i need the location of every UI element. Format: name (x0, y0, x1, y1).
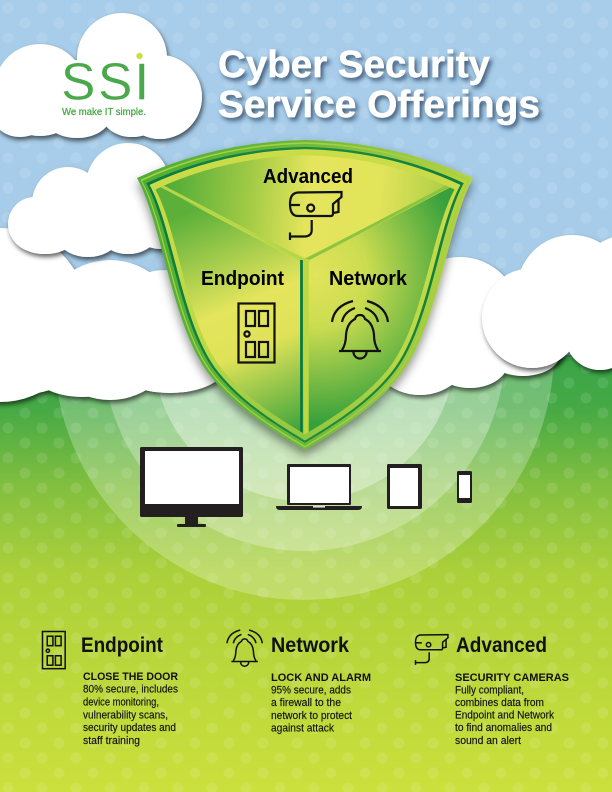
green ground background (0, 355, 612, 792)
description: Endpoint and Network (455, 710, 555, 722)
title: Service Offerings (218, 84, 540, 126)
description: vulnerability scans, (83, 709, 168, 721)
title: Cyber Security (218, 44, 490, 86)
description: 95% secure, adds (271, 685, 352, 697)
shield rim (137, 140, 473, 450)
description: staff training (83, 735, 140, 747)
description (271, 685, 352, 735)
logo letters: ssi (61, 37, 150, 115)
icon: bell small (227, 630, 262, 666)
description (455, 685, 555, 747)
description: device monitoring, (83, 697, 159, 709)
heading: Network (271, 634, 349, 657)
cloud: logo cloud (0, 13, 202, 139)
title (218, 44, 540, 126)
heading: Advanced (456, 634, 547, 657)
cloud: right back (365, 257, 561, 395)
description: sound an alert (455, 735, 521, 747)
shield (130, 130, 480, 450)
device: phone (457, 471, 472, 503)
shield top panel (158, 155, 450, 258)
heading: Endpoint (81, 634, 163, 657)
description: against attack (271, 723, 335, 735)
icon: security camera (290, 192, 342, 240)
icon: alarm bell (332, 301, 388, 358)
logo tagline: We make IT simple. (62, 107, 146, 118)
icon: door small (42, 632, 65, 669)
device: tablet (387, 464, 422, 509)
icon: door (238, 304, 274, 362)
cloud: right front (482, 234, 612, 370)
description: a firewall to the (271, 697, 341, 709)
description: 80% secure, includes (83, 684, 179, 696)
shield panels (156, 155, 454, 434)
description: Fully compliant, (455, 685, 524, 697)
description: combines data from (455, 697, 544, 709)
logo dot (136, 53, 143, 59)
cloud: middle left behind shield (8, 143, 186, 257)
device: laptop (276, 464, 362, 510)
icon: camera small (416, 635, 448, 665)
description: to find anomalies and (455, 722, 552, 734)
shield right panel (306, 188, 454, 434)
shield label: Advanced: Advanced (263, 166, 353, 188)
description: network to protect (271, 710, 352, 722)
shield label: Network: Network (329, 268, 408, 290)
subheading: CLOSE THE DOOR (83, 671, 178, 683)
subheading: LOCK AND ALARM (271, 672, 371, 684)
shield divider lines (160, 186, 450, 434)
sky background (0, 0, 612, 400)
device: desktop monitor (140, 447, 243, 527)
cloud: large left (0, 228, 228, 402)
panel: Endpoint (42, 632, 179, 747)
subheading: SECURITY CAMERAS (455, 672, 569, 684)
description: security updates and (83, 722, 176, 734)
panel: Network (227, 630, 371, 735)
logo (61, 37, 150, 118)
panel: Advanced (416, 634, 569, 747)
signal rings behind the devices (58, 366, 554, 600)
description (83, 684, 179, 747)
shield label: Endpoint: Endpoint (201, 268, 284, 290)
shield left panel (156, 188, 301, 432)
